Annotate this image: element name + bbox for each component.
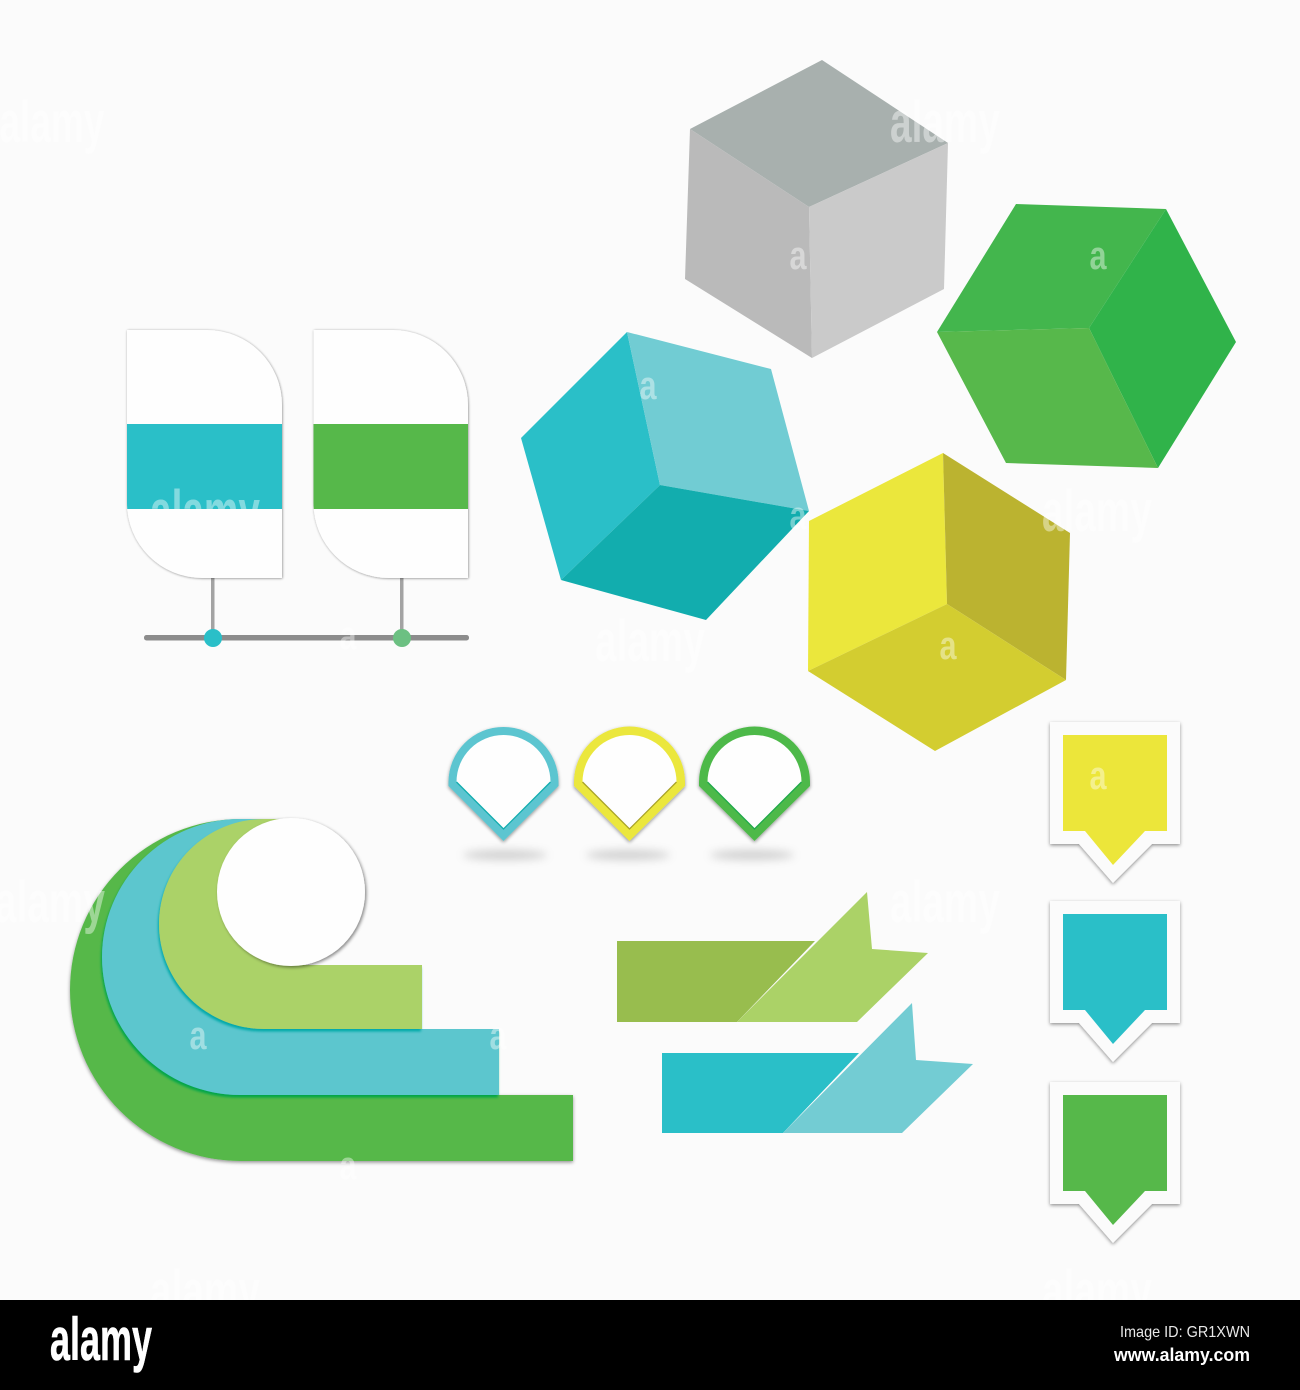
watermark overlay: alamy bbox=[150, 1259, 260, 1324]
footer image id: Image ID: GR1XWN bbox=[1120, 1324, 1250, 1341]
banner: green bbox=[617, 892, 928, 1022]
watermark overlay: a bbox=[790, 494, 807, 538]
pin: teal bbox=[448, 727, 558, 860]
watermark overlay: a bbox=[490, 1014, 507, 1058]
watermark overlay: alamy bbox=[1042, 1259, 1152, 1324]
watermark overlay: a bbox=[340, 1144, 357, 1188]
stem: second card bbox=[400, 578, 404, 636]
cube: green bbox=[937, 204, 1236, 468]
card: teal band bbox=[127, 330, 282, 578]
timeline axis bbox=[144, 635, 469, 640]
tag: green bbox=[1050, 1082, 1180, 1243]
tag: yellow bbox=[1050, 722, 1180, 883]
watermark overlay: a bbox=[1090, 234, 1107, 278]
watermark overlay: a bbox=[790, 234, 807, 278]
watermark overlay: alamy bbox=[0, 90, 104, 155]
watermark overlay: alamy bbox=[595, 609, 705, 674]
timeline dot: green bbox=[393, 629, 411, 647]
watermark overlay: alamy bbox=[890, 90, 1000, 155]
watermark overlay: a bbox=[1090, 754, 1107, 798]
timeline with two cards bbox=[127, 330, 469, 647]
cube: yellow bbox=[808, 453, 1070, 751]
watermark overlay bbox=[0, 90, 1152, 1324]
footer bar bbox=[0, 1300, 1300, 1390]
watermark overlay: alamy bbox=[890, 870, 1000, 935]
cube: gray bbox=[685, 60, 948, 358]
ribbon: green bbox=[70, 819, 573, 1161]
banner: teal bbox=[662, 1003, 973, 1133]
timeline dot: teal bbox=[204, 629, 222, 647]
ribbon: teal bbox=[102, 819, 499, 1095]
ribbon: light green bbox=[159, 819, 422, 1029]
watermark overlay: alamy bbox=[1042, 479, 1152, 544]
white circle bbox=[217, 818, 365, 966]
pin: green bbox=[699, 727, 810, 860]
watermark overlay: a bbox=[340, 614, 357, 658]
watermark overlay: alamy bbox=[150, 479, 260, 544]
stem: first card bbox=[211, 578, 214, 636]
tag: teal bbox=[1050, 901, 1180, 1062]
stacked curved ribbons bbox=[70, 818, 573, 1161]
footer website: www.alamy.com bbox=[1113, 1345, 1250, 1365]
card: green band bbox=[314, 330, 468, 578]
watermark overlay: a bbox=[190, 1014, 207, 1058]
pin: yellow bbox=[574, 727, 685, 860]
cube: teal bbox=[521, 332, 809, 620]
watermark overlay: a bbox=[940, 624, 957, 668]
footer logo: alamy bbox=[50, 1306, 152, 1373]
watermark overlay: a bbox=[640, 364, 657, 408]
